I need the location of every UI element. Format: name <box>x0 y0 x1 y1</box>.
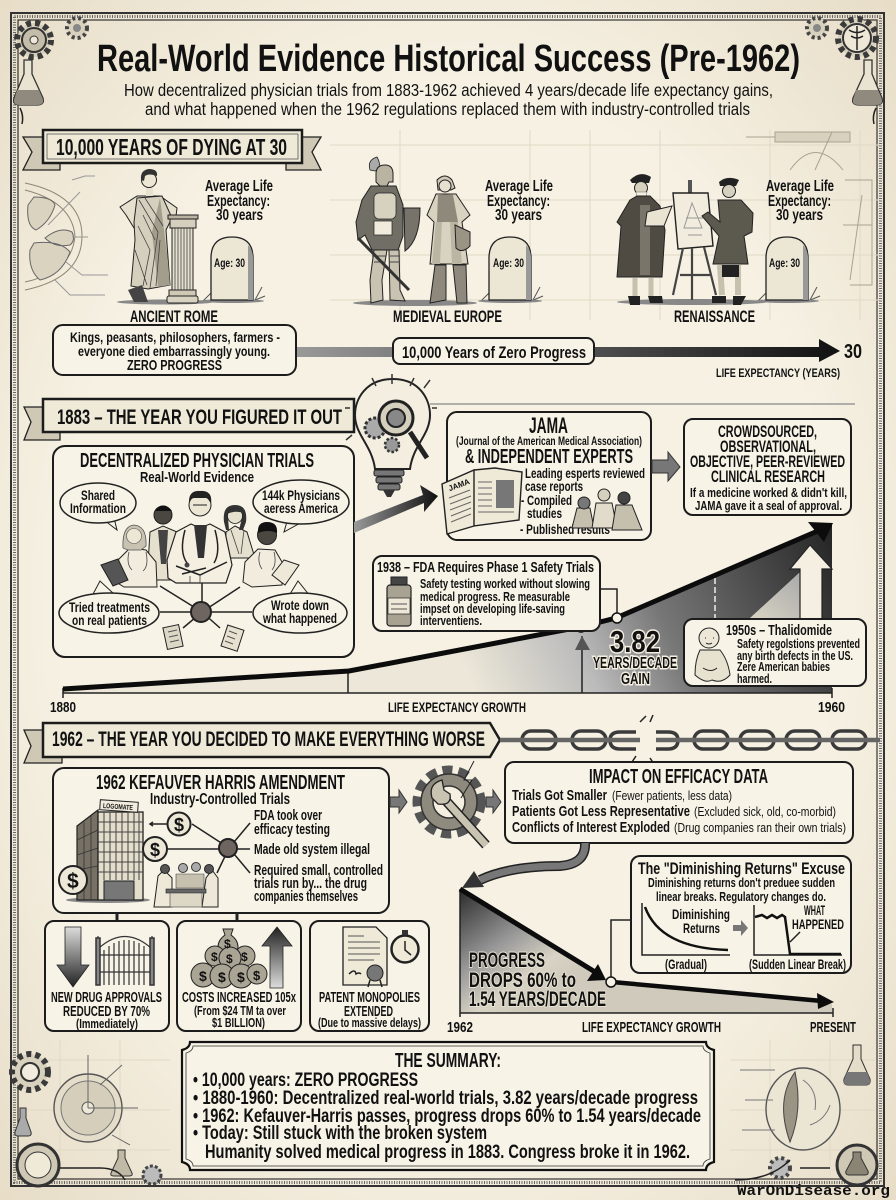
panel: the summary: • Today: Still stuck with the broken system <box>193 1122 487 1144</box>
stat: 3.82 years per decade: YEARS/DECADE <box>593 655 677 672</box>
hub and spokes <box>160 583 252 628</box>
panel: impact on efficacy data: (Drug companies ran their own trials) <box>674 820 846 835</box>
bubble: tried treatments: Tried treatments <box>69 599 150 615</box>
small arrow <box>733 920 748 936</box>
marker <box>606 977 616 987</box>
bubble: tried treatments <box>59 581 159 633</box>
panel: JAMA and independent experts: & INDEPENDENT EXPERTS <box>465 446 633 468</box>
markers <box>576 622 586 632</box>
low growth line <box>612 982 822 1001</box>
ornament: top left gears and flask <box>14 18 87 124</box>
panel: crowdsourced research: CROWDSOURCED, <box>718 423 817 441</box>
stat: 3.82 years per decade <box>593 624 677 688</box>
list: amendment effects: companies themselves <box>254 889 358 905</box>
figure: Roman citizen and column <box>117 169 213 304</box>
arrow: zero progress timeline <box>296 338 840 364</box>
axis labels: 1962 <box>447 1019 473 1036</box>
icon: bottom left diagram <box>54 1055 138 1145</box>
text: Medieval life expectancy: Expectancy: <box>487 193 550 210</box>
icon: compass sketch right <box>746 132 872 285</box>
panel: costs increased <box>177 921 301 1031</box>
panel: 1938 FDA: medical progress. Re measurable <box>420 589 570 604</box>
connector 1938 <box>600 589 617 618</box>
label: Ancient Rome: ANCIENT ROME <box>130 307 218 326</box>
mini chart: sudden break <box>749 903 846 972</box>
panel: costs increased: $ <box>253 968 261 983</box>
panel: costs increased: (From $24 TM ta over <box>194 1004 286 1018</box>
figure: scientists at table <box>154 862 218 907</box>
icon: tombstone Rome <box>200 237 265 303</box>
icon: gear and wrench with arrows <box>390 761 501 845</box>
dashed guide <box>714 578 716 618</box>
icon: stopwatch <box>392 930 418 962</box>
panel: costs increased: $1 BILLION) <box>212 1016 265 1030</box>
mini chart: gradual: Diminishing <box>672 907 730 922</box>
heading: DECENTRALIZED PHYSICIAN TRIALS <box>80 450 314 472</box>
area <box>63 524 832 693</box>
text: Renaissance life expectancy: Average Life <box>766 178 834 195</box>
panel: JAMA and independent experts: studies <box>527 506 562 521</box>
label: Renaissance: RENAISSANCE <box>674 307 755 326</box>
arrow: curved impact to decline <box>462 843 585 888</box>
panel: costs increased: $ <box>241 950 248 964</box>
panel: JAMA and independent experts: case reports <box>525 479 583 494</box>
chart: decline after 1962: DROPS 60% to <box>469 969 576 992</box>
axis label: life expectancy years: LIFE EXPECTANCY (YEARS) <box>716 366 840 380</box>
arrowhead <box>808 522 833 542</box>
banner: 10,000 years of dying at 30 <box>23 130 321 170</box>
panel: 1950s thalidomide: any birth defects in the US. <box>737 649 853 663</box>
icon: broken chain <box>500 715 880 764</box>
panel: decentralized physician trials <box>53 446 354 657</box>
subheading: Real-World Evidence <box>140 469 254 486</box>
icon: hub and spokes <box>167 823 250 873</box>
panel: JAMA and independent experts: JAMA <box>529 413 568 438</box>
icon: bottom right cell diagram <box>740 1068 840 1150</box>
panel: impact on efficacy data: IMPACT ON EFFICACY DATA <box>589 766 768 788</box>
panel: JAMA and independent experts: (Journal of the American Medical Association) <box>456 434 642 448</box>
subtitle: and what happened when the 1962 regulations replaced them with industry-controlled trials <box>145 99 750 119</box>
text: Rome life expectancy: Expectancy: <box>207 193 270 210</box>
panel: the summary: Humanity solved medical progress in 1883. Congress broke it in 1962. <box>205 1141 690 1163</box>
panel: patent monopolies <box>310 921 429 1031</box>
text: Rome life expectancy: 30 years <box>216 207 263 224</box>
list: amendment effects: Made old system illegal <box>254 842 370 858</box>
icon: tombstone Rome: Age: 30 <box>214 256 245 270</box>
panel: 1950s thalidomide: Zere American babies <box>737 660 830 674</box>
connectors: amendment to outcomes <box>117 913 237 921</box>
panel: costs increased: $ <box>211 950 218 964</box>
subtitle <box>124 80 773 119</box>
icon: patent document <box>343 927 387 987</box>
callout: zero progress: Kings, peasants, philosophers, farmers - <box>70 329 280 345</box>
icon: down arrow <box>57 927 89 987</box>
panel: the summary: • 10,000 years: ZERO PROGRESS <box>193 1069 418 1091</box>
ornament: top right gears, caduceus and flask <box>807 18 882 124</box>
panel: diminishing returns excuse: linear breaks. Regulatory changes do. <box>656 889 826 904</box>
panel: JAMA and independent experts: Leading esperts reviewed <box>525 466 645 481</box>
list: amendment effects: efficacy testing <box>254 822 330 838</box>
icon: medicine bottle <box>387 577 411 626</box>
text: Renaissance life expectancy: Expectancy: <box>768 193 831 210</box>
icon: open book <box>442 468 522 534</box>
connector <box>611 920 631 982</box>
arrowhead <box>587 964 606 981</box>
panel: 1950s thalidomide <box>684 619 866 686</box>
panel: 1938 FDA: interventiens. <box>420 613 482 628</box>
bubble: 144k physicians <box>253 480 349 532</box>
chart: decline after 1962 <box>447 889 856 1036</box>
panel: crowdsourced research <box>684 419 851 515</box>
panel: 1950s thalidomide: 1950s – Thalidomide <box>726 622 832 639</box>
list: amendment effects: trials run by... the drug <box>254 876 367 892</box>
ornament: bottom right flasks and gears <box>735 1045 877 1185</box>
figure: Renaissance scholars and easel <box>617 174 767 305</box>
bubble: shared information: Information <box>70 500 126 516</box>
text: Rome life expectancy <box>205 178 273 224</box>
chart: decline after 1962: LIFE EXPECTANCY GROWTH <box>582 1019 721 1036</box>
list: amendment effects: Required small, controlled <box>254 863 383 879</box>
text: Renaissance life expectancy <box>766 178 834 224</box>
panel: impact on efficacy data: Patients Got Less Representative <box>512 803 690 820</box>
mini chart: gradual <box>642 903 730 972</box>
text: Rome life expectancy: Average Life <box>205 178 273 195</box>
panel: JAMA and independent experts: - Published results <box>520 522 610 537</box>
icon: closed gate <box>96 936 154 985</box>
panel: new drug approvals: REDUCED BY 70% <box>63 1004 150 1020</box>
panel: patent monopolies: PATENT MONOPOLIES <box>319 990 420 1006</box>
banner: 1883 <box>24 399 354 440</box>
text: Medieval life expectancy: Average Life <box>485 178 553 195</box>
panel: patent monopolies: (Due to massive delays) <box>318 1016 421 1030</box>
panel: crowdsourced research: JAMA gave it a seal of approval. <box>695 498 842 513</box>
callout: zero progress <box>53 325 296 375</box>
stat: 3.82 years per decade: GAIN <box>621 671 650 688</box>
banner: 1962 <box>24 723 500 763</box>
panel: costs increased: COSTS INCREASED 105x <box>182 990 296 1006</box>
axis <box>63 636 832 698</box>
panel: the summary <box>182 1042 714 1170</box>
panel: impact on efficacy data <box>505 762 853 843</box>
divider line section two <box>430 403 855 405</box>
bubble: wrote down: Wrote down <box>271 597 329 613</box>
icon: dollar coins: $ <box>174 815 184 835</box>
panel: 1938 FDA: 1938 – FDA Requires Phase 1 Safety Trials <box>377 560 594 576</box>
panel: JAMA and independent experts: - Compiled <box>521 493 572 508</box>
icon: dollar coins <box>59 812 190 894</box>
icon: corporate building: LOGOMATE <box>103 803 133 812</box>
decline caption: PROGRESS <box>469 949 545 972</box>
panel: new drug approvals <box>45 921 169 1031</box>
label: Medieval Europe: MEDIEVAL EUROPE <box>393 307 502 326</box>
panel: impact on efficacy data: Trials Got Smaller <box>512 787 607 804</box>
icon: dollar coins: $ <box>67 870 79 893</box>
icon: money bags <box>191 929 267 988</box>
subtitle: How decentralized physician trials from 1883-1962 achieved 4 years/decade life expectancy gains, <box>124 80 773 100</box>
text: Medieval life expectancy: 30 years <box>495 207 542 224</box>
stat: 3.82 years per decade: 3.82 <box>610 624 660 659</box>
panel: 1938 FDA: Safety testing worked without slowing <box>420 576 590 591</box>
growth line <box>63 530 820 689</box>
icon: tombstone Renaissance: Age: 30 <box>769 256 800 270</box>
bubble: 144k physicians: 144k Physicians <box>262 487 340 503</box>
panel: crowdsourced research: OBSERVATIONAL, <box>720 438 816 456</box>
panel: patent monopolies: EXTENDED <box>344 1004 393 1020</box>
banner: 10,000 years of dying at 30: 10,000 YEARS OF DYING AT 30 <box>56 134 287 160</box>
panel: impact on efficacy data: Conflicts of Interest Exploded <box>512 819 670 836</box>
decline line <box>460 889 600 975</box>
chart: decline after 1962: PRESENT <box>810 1019 856 1036</box>
mini chart: sudden break: HAPPENED <box>792 917 844 932</box>
axis <box>460 889 833 1017</box>
bubble: wrote down <box>253 581 347 633</box>
panel: Kefauver Harris: Industry-Controlled Trials <box>150 791 290 808</box>
area <box>460 889 832 1013</box>
list: amendment effects: FDA took over <box>254 808 322 824</box>
panel: new drug approvals: NEW DRUG APPROVALS <box>51 990 162 1006</box>
mini chart: sudden break: (Sudden Linear Break) <box>749 957 846 972</box>
up arrow 1938 <box>575 636 590 650</box>
chart: decline after 1962: 1.54 YEARS/DECADE <box>469 988 606 1011</box>
text: Renaissance life expectancy: 30 years <box>776 207 823 224</box>
text: Medieval life expectancy <box>485 178 553 224</box>
arrow: JAMA to research <box>652 452 680 481</box>
list: amendment effects <box>254 808 383 905</box>
bubble: tried treatments: on real patients <box>72 612 147 628</box>
banner: 1962: 1962 – THE YEAR YOU DECIDED TO MAKE EVERYTHING WORSE <box>52 728 485 751</box>
callout: zero progress: ZERO PROGRESS <box>127 357 222 374</box>
icon: tombstone Renaissance <box>755 237 820 303</box>
icon: dollar coins: $ <box>150 840 160 860</box>
arrow: zero progress timeline: 10,000 Years of Zero Progress <box>402 343 586 362</box>
icon: anatomy sketch left <box>25 176 108 295</box>
panel: diminishing returns excuse <box>631 856 851 973</box>
callout: zero progress: everyone died embarrassingly young. <box>78 343 270 359</box>
value: 30: 30 <box>844 341 862 363</box>
bubble: wrote down: what happened <box>262 610 337 626</box>
icon: experts <box>572 489 642 530</box>
panel: costs increased: $ <box>226 952 233 966</box>
panel: costs increased: $ <box>237 969 245 985</box>
chart: life expectancy growth <box>50 522 845 716</box>
mini chart: sudden break: WHAT <box>804 903 825 918</box>
panel: new drug approvals: (Immediately) <box>76 1017 138 1031</box>
panel: the summary: • 1880-1960: Decentralized real-world trials, 3.82 years/decade progress <box>193 1087 698 1109</box>
chart: life expectancy growth: LIFE EXPECTANCY GROWTH <box>388 699 526 715</box>
panel: impact on efficacy data: (Excluded sick, old, co-morbid) <box>694 804 836 819</box>
arrowhead end <box>817 993 834 1009</box>
lighter wedge <box>750 572 800 618</box>
mini chart: gradual: Returns <box>683 921 720 936</box>
figure: medieval knight and peasant <box>353 157 477 306</box>
panel: impact on efficacy data: (Fewer patients, less data) <box>612 788 732 803</box>
panel: crowdsourced research: CLINICAL RESEARCH <box>711 468 825 486</box>
icon: up arrow <box>262 927 292 988</box>
icon: light bulb with gears and magnifier <box>345 374 437 497</box>
arrow: to JAMA <box>354 485 438 533</box>
icon: corporate building <box>66 800 150 903</box>
panel: 1938 FDA: impset on developing life-saving <box>420 601 565 616</box>
panel: the summary: • 1962: Kefauver-Harris passes, progress drops 60% to 1.54 years/decade <box>193 1105 701 1127</box>
icon: tombstone Medieval: Age: 30 <box>493 256 524 270</box>
banner: 1883: 1883 – THE YEAR YOU FIGURED IT OUT <box>57 406 342 429</box>
watermark: WarOnDisease.org <box>737 1183 890 1200</box>
panel: crowdsourced research: If a medicine worked & didn't kill, <box>690 485 847 500</box>
panel: 1950s thalidomide: harmed. <box>737 672 772 686</box>
axis labels: 1880 <box>50 699 76 716</box>
icon: tombstone Medieval <box>478 237 543 303</box>
mini chart: gradual: (Gradual) <box>665 957 707 972</box>
icons: clipboards <box>163 625 244 651</box>
bubble: 144k physicians: aeress America <box>264 500 338 516</box>
chart: life expectancy growth: 1960 <box>818 699 845 716</box>
panel: 1938 FDA <box>373 556 600 631</box>
panel: Kefauver Harris: 1962 KEFAUVER HARRIS AMENDMENT <box>96 772 345 794</box>
panel: Kefauver Harris <box>53 768 389 913</box>
panel: costs increased: $ <box>224 937 231 951</box>
panel: costs increased: $ <box>218 969 226 985</box>
bubble: shared information <box>60 483 136 530</box>
ornament: bottom left gears <box>12 1054 161 1186</box>
panel: costs increased: $ <box>199 968 207 984</box>
bubble: shared information: Shared <box>81 487 115 503</box>
white up arrow <box>790 545 832 620</box>
panel: JAMA and independent experts <box>442 412 651 540</box>
panel: the summary: THE SUMMARY: <box>395 1050 501 1072</box>
icon: open book: JAMA <box>447 477 471 493</box>
figure: physicians group <box>101 491 299 587</box>
icon: baby <box>695 628 730 681</box>
